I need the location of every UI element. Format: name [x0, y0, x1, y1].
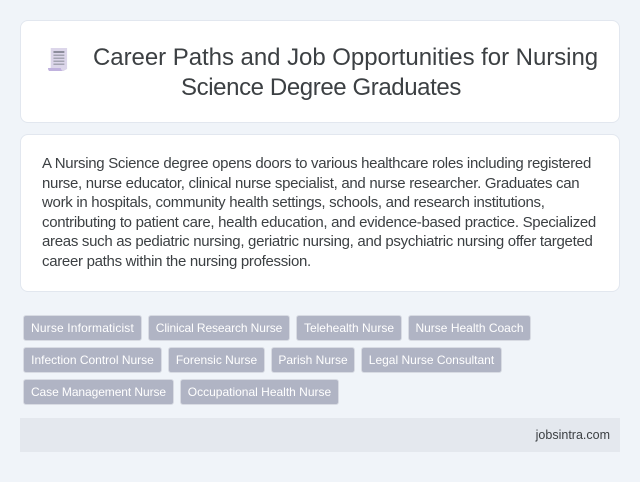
description text: A Nursing Science degree opens doors to various healthcare roles including registered	[42, 155, 591, 172]
tag	[148, 315, 290, 341]
description text	[42, 155, 596, 270]
tag: Nurse Informaticist	[31, 321, 134, 335]
tag: Occupational Health Nurse	[188, 385, 331, 399]
tag	[23, 379, 174, 405]
tag: Nurse Health Coach	[415, 321, 524, 335]
tag	[23, 315, 142, 341]
tag	[271, 347, 355, 373]
tag	[23, 347, 162, 373]
description text: contributing to patient care, health education, and evidence-based practice. Specialized	[42, 214, 596, 230]
description text: career paths within the nursing profession.	[42, 252, 311, 270]
tag: Infection Control Nurse	[31, 353, 154, 367]
description text: nurse, nurse educator, clinical nurse specialist, and nurse researcher. Graduates can	[42, 174, 579, 192]
description panel	[20, 134, 620, 292]
description text: areas such as pediatric nursing, geriatric nursing, and psychiatric nursing offer targeted	[42, 233, 593, 250]
tag	[180, 379, 339, 405]
job tags	[23, 315, 531, 405]
tag: Legal Nurse Consultant	[369, 353, 494, 367]
footer bar	[20, 418, 620, 452]
title: Career Paths and Job Opportunities for Nursing	[93, 44, 598, 71]
footer source text: jobsintra.com	[536, 428, 610, 442]
tag: Case Management Nurse	[31, 385, 166, 399]
tag	[361, 347, 502, 373]
title: Science Degree Graduates	[181, 74, 461, 101]
tag	[296, 315, 402, 341]
title	[93, 44, 598, 101]
header panel	[20, 20, 620, 123]
tag	[408, 315, 531, 341]
icon: document	[48, 48, 67, 71]
tag: Forensic Nurse	[176, 353, 257, 367]
tag: Telehealth Nurse	[304, 321, 394, 335]
tag: Clinical Research Nurse	[156, 321, 282, 335]
tag: Parish Nurse	[278, 353, 348, 367]
tag	[168, 347, 265, 373]
description text: work in hospitals, community health settings, schools, and research institutions,	[42, 194, 545, 211]
